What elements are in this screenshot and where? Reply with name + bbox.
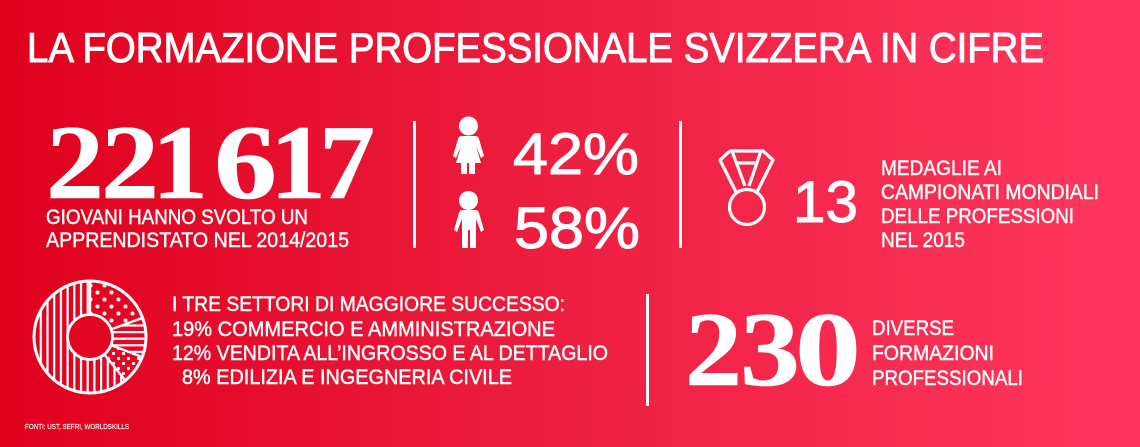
sectors text [172,292,608,389]
apprentices caption: APPRENDISTATO NEL 2014/2015 [46,228,349,252]
stat 42%: 42% [513,122,639,187]
big number 230: 3 [740,291,800,408]
apprentices caption: GIOVANI HANNO SVOLTO UN [46,205,308,229]
stat 13: 13 [793,170,858,235]
title: LA FORMAZIONE PROFESSIONALE SVIZZERA IN CIFRE [27,24,1044,71]
big number 221 617: 1 [270,104,326,221]
training caption: FORMAZIONI [872,341,994,365]
big number 221 617 [46,104,375,221]
sources: FONTI: UST, SEFRI, WORLDSKILLS [25,422,129,431]
big number 221 617: 2 [46,104,104,221]
icon: female [453,116,484,174]
panel: apprentices [46,104,375,252]
big number 221 617: 2 [101,104,159,221]
icon: medal [720,151,773,224]
big number 221 617: 7 [319,104,375,221]
training caption: PROFESSIONALI [872,366,1023,390]
big number 221 617: 6 [214,104,277,221]
sectors text: 19% COMMERCIO E AMMINISTRAZIONE [172,317,555,341]
icon: male [454,191,484,248]
big number 230 [685,291,861,408]
medals caption: MEDAGLIE AI [881,156,1002,180]
big number 221 617: 1 [152,104,208,221]
medals caption: DELLE PROFESSIONI [881,204,1074,228]
medals caption [881,156,1099,252]
sectors text: I TRE SETTORI DI MAGGIORE SUCCESSO: [172,292,565,316]
training caption [872,316,1023,390]
panel: medals [720,151,1099,252]
sectors text: 12% VENDITA ALL’INGROSSO E AL DETTAGLIO [172,341,608,365]
stat 58%: 58% [514,196,640,261]
panel: training programmes [685,291,1023,408]
big number 230: 0 [795,291,861,408]
panel: gender split [453,116,640,261]
apprentices caption [46,205,349,252]
panel: top sectors [33,280,608,394]
training caption: DIVERSE [872,316,954,340]
medals caption: CAMPIONATI MONDIALI [881,180,1099,204]
big number 230: 2 [685,291,742,408]
medals caption: NEL 2015 [881,228,965,252]
sectors text: 8% EDILIZIA E INGEGNERIA CIVILE [182,365,512,389]
pie chart [33,280,147,394]
